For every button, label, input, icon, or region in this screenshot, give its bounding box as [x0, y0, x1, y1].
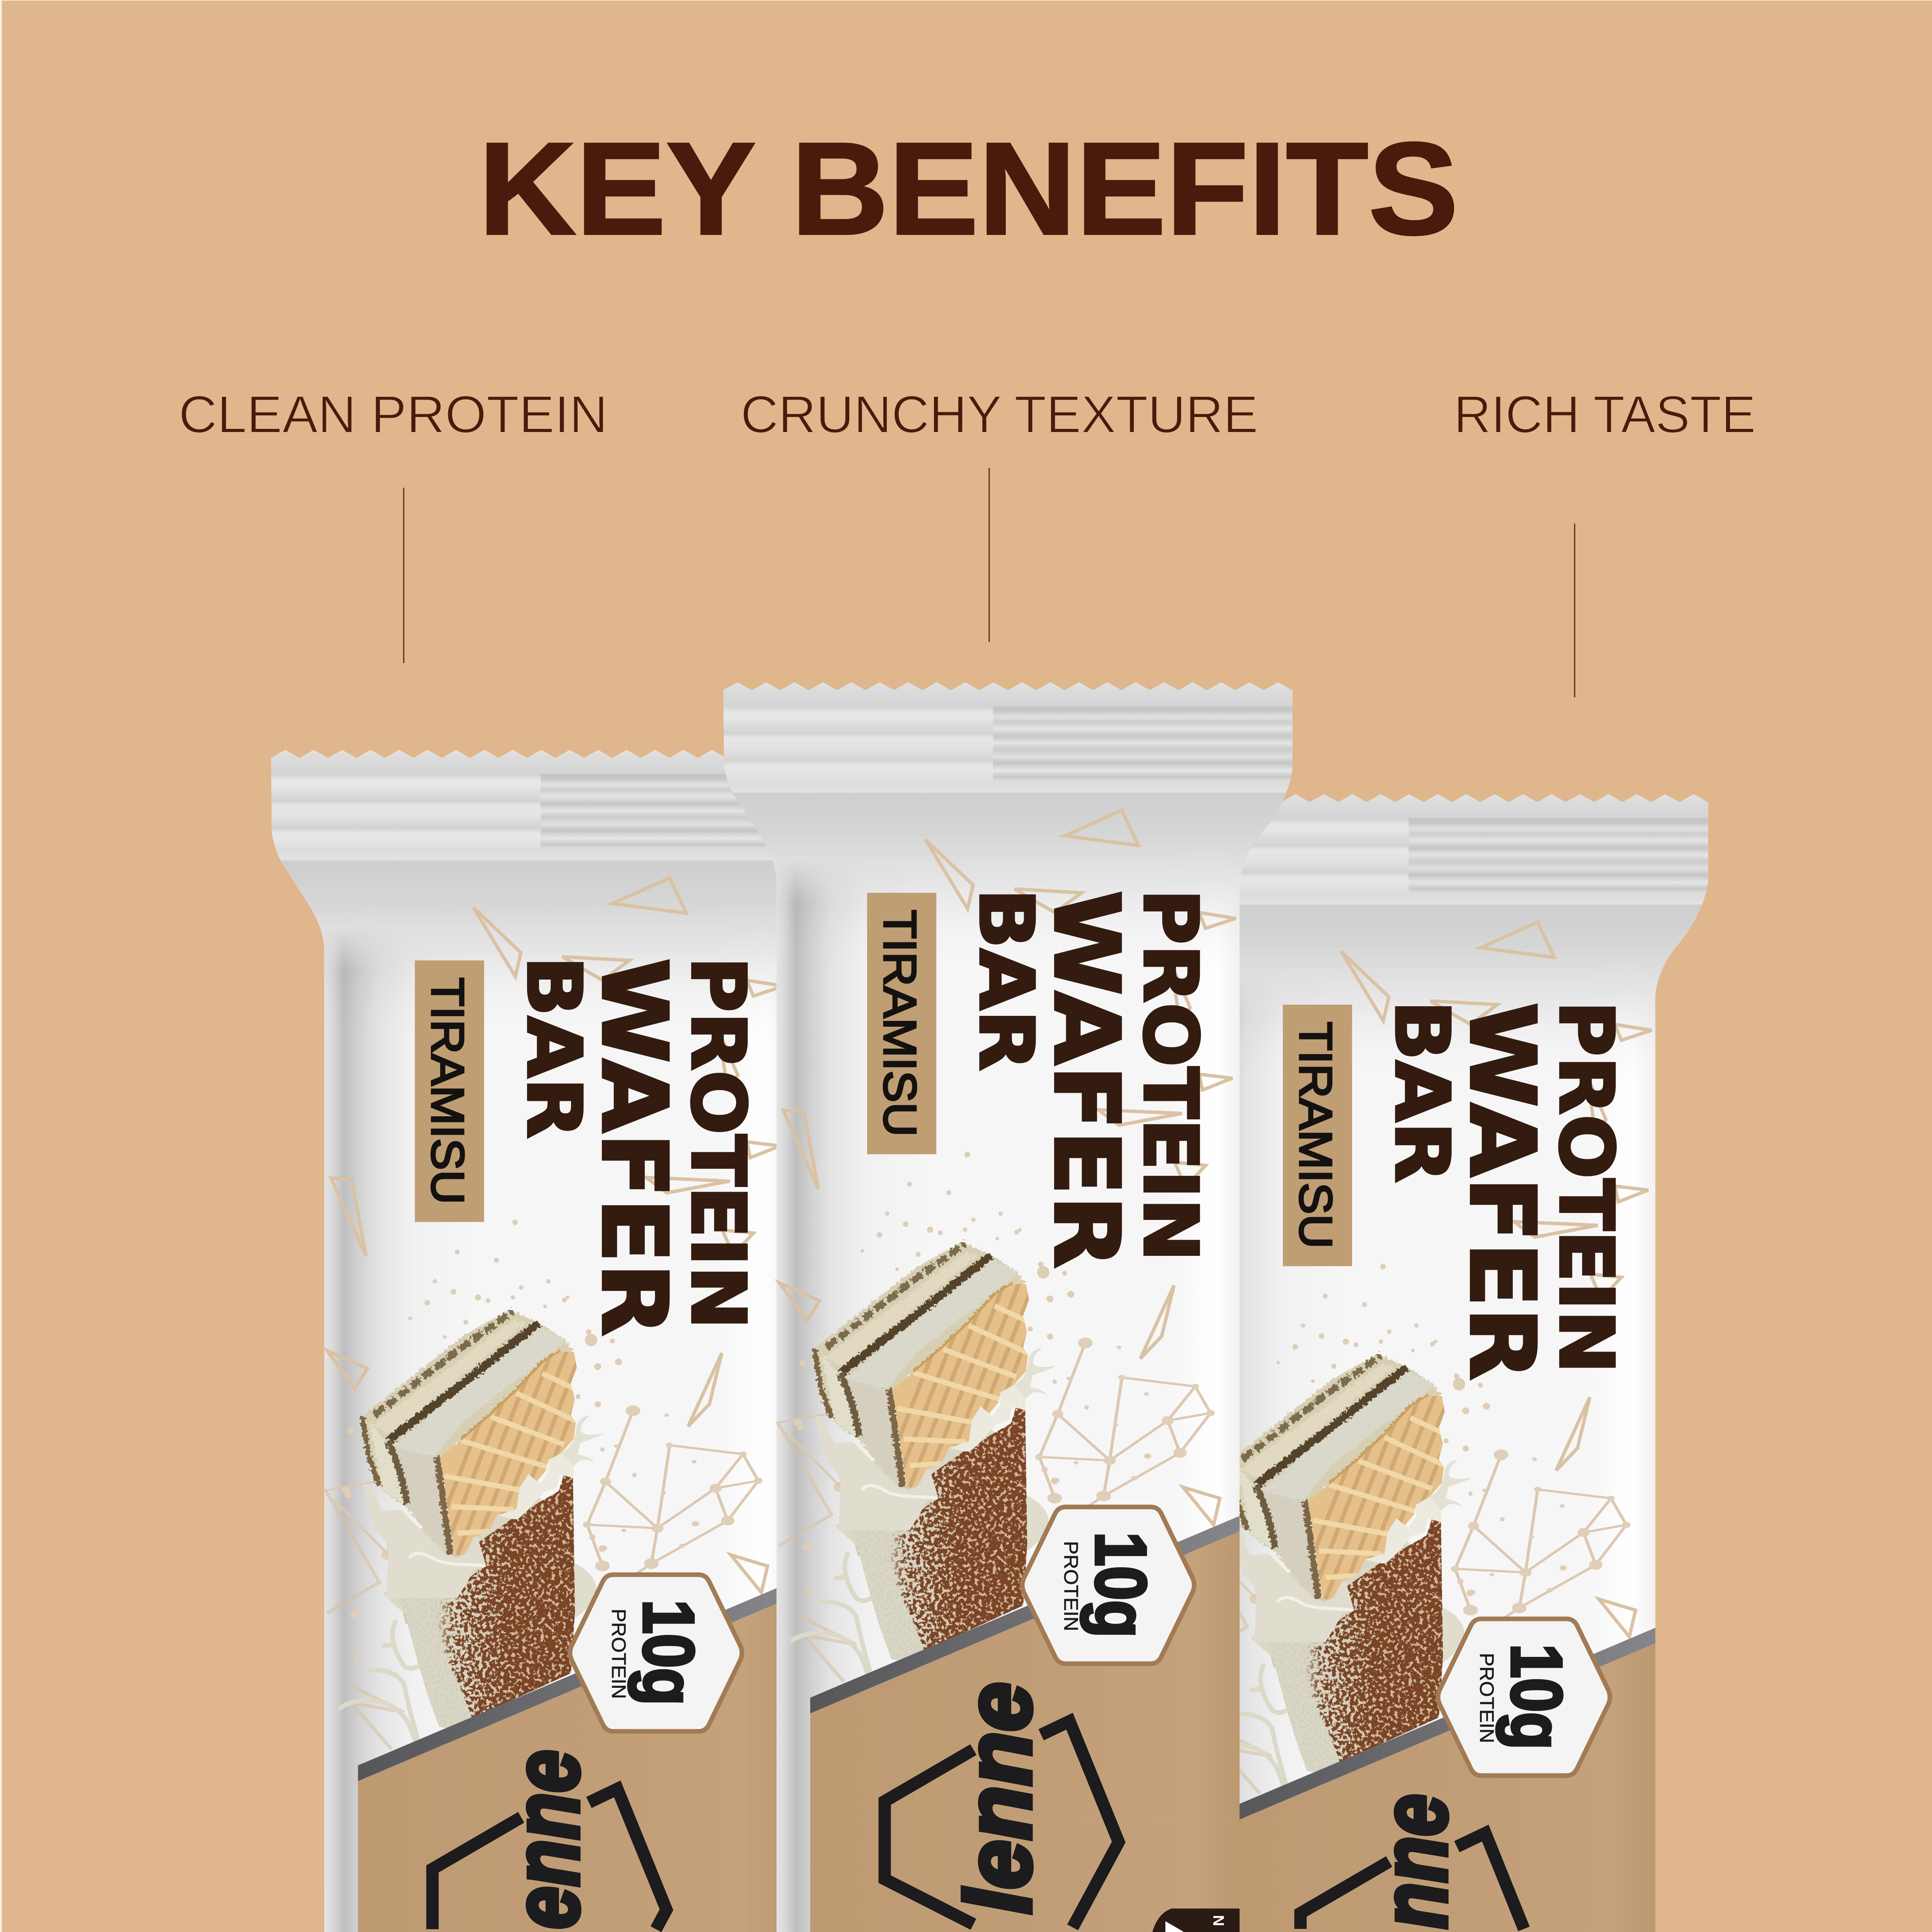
left product bar — [259, 748, 846, 1932]
wafer image — [340, 1310, 616, 1741]
tan panel — [358, 1583, 787, 1888]
product name — [963, 888, 1213, 1269]
lower wrapper extension — [324, 1888, 787, 1932]
product name: PROTEIN — [1543, 1001, 1629, 1373]
10g badge: 10g — [628, 1600, 708, 1706]
tan panel — [810, 1516, 1240, 1820]
connector: rich taste — [1574, 524, 1575, 697]
label: crunchy texture: CRUNCHY TEXTURE — [741, 385, 1258, 444]
10g badge: 10g — [1081, 1532, 1161, 1638]
product name: WAFER — [1450, 1002, 1554, 1381]
brand logo — [885, 1682, 1119, 1927]
wafer image — [1208, 1354, 1484, 1785]
label: rich taste: RICH TASTE — [1454, 385, 1756, 444]
10g badge: PROTEIN — [608, 1609, 630, 1699]
brand logo — [432, 1750, 667, 1929]
nutrition corner badge: N — [1210, 1915, 1227, 1926]
wrapper shell — [711, 680, 1298, 1820]
10g badge: PROTEIN — [1476, 1653, 1498, 1743]
product name: WAFER — [582, 958, 686, 1336]
label: clean protein: CLEAN PROTEIN — [179, 385, 608, 444]
pattern triangles — [777, 810, 1236, 1682]
10g badge — [1438, 1619, 1610, 1776]
pattern triangles — [1193, 922, 1651, 1794]
flavour tag — [867, 893, 936, 1154]
product name — [510, 956, 761, 1336]
product name: WAFER — [1034, 890, 1138, 1269]
wafer image — [793, 1242, 1068, 1673]
network graphic — [1192, 1264, 1631, 1706]
10g badge: 10g — [1497, 1644, 1577, 1750]
nutrition corner badge — [1152, 1908, 1240, 1932]
network graphic — [325, 1219, 763, 1662]
product name: PROTEIN — [1127, 889, 1213, 1262]
product name: BAR — [963, 888, 1049, 1071]
flavour tag: TIRAMISU — [1290, 1022, 1341, 1248]
product name: PROTEIN — [675, 957, 761, 1329]
flavour tag: TIRAMISU — [874, 910, 925, 1137]
10g badge: PROTEIN — [1060, 1541, 1082, 1631]
product name — [1379, 1000, 1629, 1381]
tan panel — [1226, 1628, 1655, 1932]
flavour tag — [415, 961, 484, 1222]
wrapper shell — [259, 748, 846, 1888]
product name: BAR — [1379, 1000, 1465, 1183]
right product bar — [1127, 792, 1714, 1932]
brand logo: nne — [1362, 1794, 1466, 1929]
connector: clean protein — [403, 488, 405, 663]
10g badge — [1022, 1507, 1194, 1664]
lower wrapper extension — [777, 1820, 1240, 1932]
brand logo: enne — [494, 1750, 598, 1929]
10g badge — [570, 1575, 742, 1731]
brand logo: lenne — [946, 1682, 1050, 1914]
title: KEY BENEFITS — [478, 116, 1458, 262]
pattern triangles — [325, 878, 784, 1749]
brand logo — [1301, 1794, 1524, 1929]
product name: BAR — [510, 956, 597, 1138]
wrapper shell — [1127, 792, 1714, 1932]
connector: crunchy texture — [988, 468, 990, 642]
network graphic — [777, 1152, 1215, 1594]
centre product bar — [711, 680, 1298, 1932]
flavour tag: TIRAMISU — [422, 978, 473, 1204]
flavour tag — [1283, 1005, 1352, 1266]
